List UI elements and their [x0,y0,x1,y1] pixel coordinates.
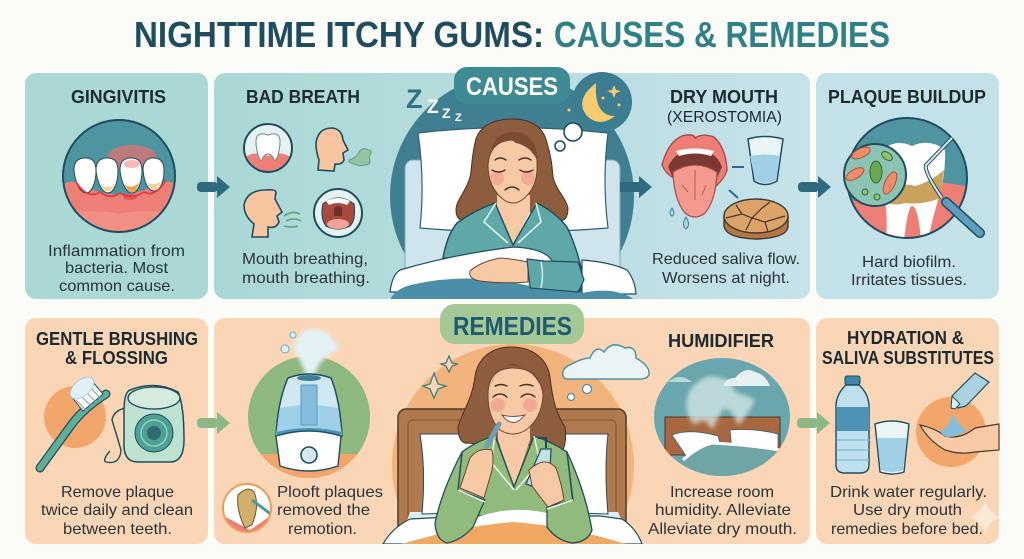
icon: water bottle [836,376,869,473]
text: brushing description: between teeth. [63,521,172,538]
heading: dry mouth: DRY MOUTH [670,87,778,107]
text: plaque removal description [277,484,383,538]
text: hydration description: Drink water regularly. [830,484,987,501]
panel: plaque buildup [816,73,999,299]
icon: water glass [875,421,909,474]
text: hydration description: remedies before bed. [831,521,983,538]
text: humidifier description [648,484,797,538]
arrow: causes to dry mouth [620,176,652,198]
title [134,14,890,55]
text: plaque description: Hard biofilm. [862,254,956,271]
icon: cracked dry disc [724,199,788,239]
icon: dry mouth with tongue [662,135,727,229]
title: NIGHTTIME ITCHY GUMS: [134,14,544,55]
heading: plaque buildup: PLAQUE BUILDUP [828,87,986,107]
icon: sleeping Zzz: Z [406,84,422,114]
arrow: brushing to humidifier [197,412,230,434]
hair [456,119,568,221]
icon: tooth in circle [244,124,292,175]
text: bad breath description: mouth breathing. [242,270,370,287]
badge: causes: CAUSES [466,73,558,101]
orange blanket [402,522,626,544]
heading: gentle brushing: & FLOSSING [65,348,168,368]
decorative sparkle [970,500,1000,534]
arrow: gingivitis to bad breath [197,176,230,198]
heading: hydration: SALIVA SUBSTITUTES [822,348,994,368]
toothbrush hand [460,449,493,498]
pyjama torso [455,436,575,520]
heading: hydration [822,328,994,368]
hair [458,347,566,452]
arrow: dry mouth to plaque [798,176,831,198]
panel: causes wide panel [214,73,810,299]
left sleeve [435,452,485,543]
heading: dry mouth: (XEROSTOMIA) [667,109,782,126]
icon: inflamed gums and teeth [60,120,180,240]
heading: bad breath: BAD BREATH [246,87,360,107]
text: plaque description: Irritates tissues. [851,272,967,289]
icon: hand with saliva substitute gel [916,373,999,467]
icon: thought bubbles [555,123,582,151]
text: humidifier description: Increase room [670,484,774,501]
white sheet right [582,260,636,294]
badge: remedies [440,304,584,344]
icon: dental floss box [105,385,184,462]
side white sheets [383,516,642,544]
right sleeve [547,452,592,543]
connector dashes [729,167,744,198]
heading: gentle brushing: GENTLE BRUSHING [36,329,198,349]
centre white sheet [478,510,546,517]
icon: sleeping Zzz: Z [455,112,462,124]
icon: sleeping Zzz: Z [427,97,439,118]
arrow: humidifier to hydration [797,412,830,434]
text: gingivitis description [48,243,185,295]
heading: humidifier: HUMIDIFIER [668,331,774,351]
illustration: smiling woman in bed [383,344,642,559]
icon: humidifier [248,326,370,478]
badge: causes [454,67,570,104]
text: gingivitis description: Inflammation from [48,243,185,260]
hand [470,258,528,283]
blue blanket [390,278,635,300]
text: dry mouth description [652,251,800,287]
text: hydration description: Use dry mouth [853,502,962,519]
badge: remedies: REMEDIES [453,311,572,341]
text: brushing description: twice daily and clean [41,502,193,519]
pyjama top [443,203,583,292]
text: dry mouth description: Worsens at night. [662,270,790,287]
icon: tooth with plaque and bacteria [844,118,967,245]
bottle hand [529,462,564,507]
white sheet left [390,247,553,292]
text: bad breath description: Mouth breathing, [242,251,368,268]
icon: moon and stars [568,72,632,132]
text: plaque removal description: removed the [277,502,370,519]
text: dry mouth description: Reduced saliva flow. [652,251,800,268]
panel: gentle brushing and flossing [25,318,208,544]
icon: head exhaling odour [316,128,371,171]
text: gingivitis description: common cause. [59,278,175,295]
icon: cloud thought [563,345,649,400]
text: plaque removal description: remotion. [288,521,357,538]
heading: dry mouth [667,87,782,126]
icon: mouth breathing head [244,190,301,237]
text: humidifier description: humidity. Alleviate [655,502,791,519]
text: humidifier description: Alleviate dry mouth. [648,521,797,538]
text: plaque description [851,254,967,289]
face [488,368,543,434]
title: CAUSES & REMEDIES [554,14,890,55]
panel: remedies wide panel [214,318,810,544]
text: brushing description [41,484,193,538]
pillows [419,434,473,514]
panel: hydration and saliva substitutes [816,318,999,544]
neck [498,425,530,487]
heading: gentle brushing [36,329,198,368]
text: brushing description: Remove plaque [61,484,174,501]
neck [497,195,530,245]
icon: toothbrush [40,373,106,468]
icon: open mouth in circle [314,189,362,237]
icon: sleeping Zzz [406,84,462,124]
face [488,140,537,203]
icon: dental scaler tool [926,138,980,233]
icon: humid bedroom scene [654,358,790,485]
panel: gingivitis [25,73,208,299]
heading: gingivitis: GINGIVITIS [71,87,166,107]
heading: hydration: HYDRATION & [847,328,964,348]
text: plaque removal description: Plooft plaques [277,484,383,501]
icon: sleeping Zzz: Z [442,105,451,121]
text: bad breath description [242,251,370,287]
icon: plaque removal inset [222,484,272,535]
text: gingivitis description: bacteria. Most [65,260,169,277]
text: hydration description [830,484,987,538]
illustration: sleeping woman in bed [389,88,637,299]
icon: glass of water [748,136,783,184]
sleeve cuff [527,259,584,292]
sanitizer bottle [526,449,551,492]
pillow [418,128,608,232]
icon: sparkles [423,356,458,398]
